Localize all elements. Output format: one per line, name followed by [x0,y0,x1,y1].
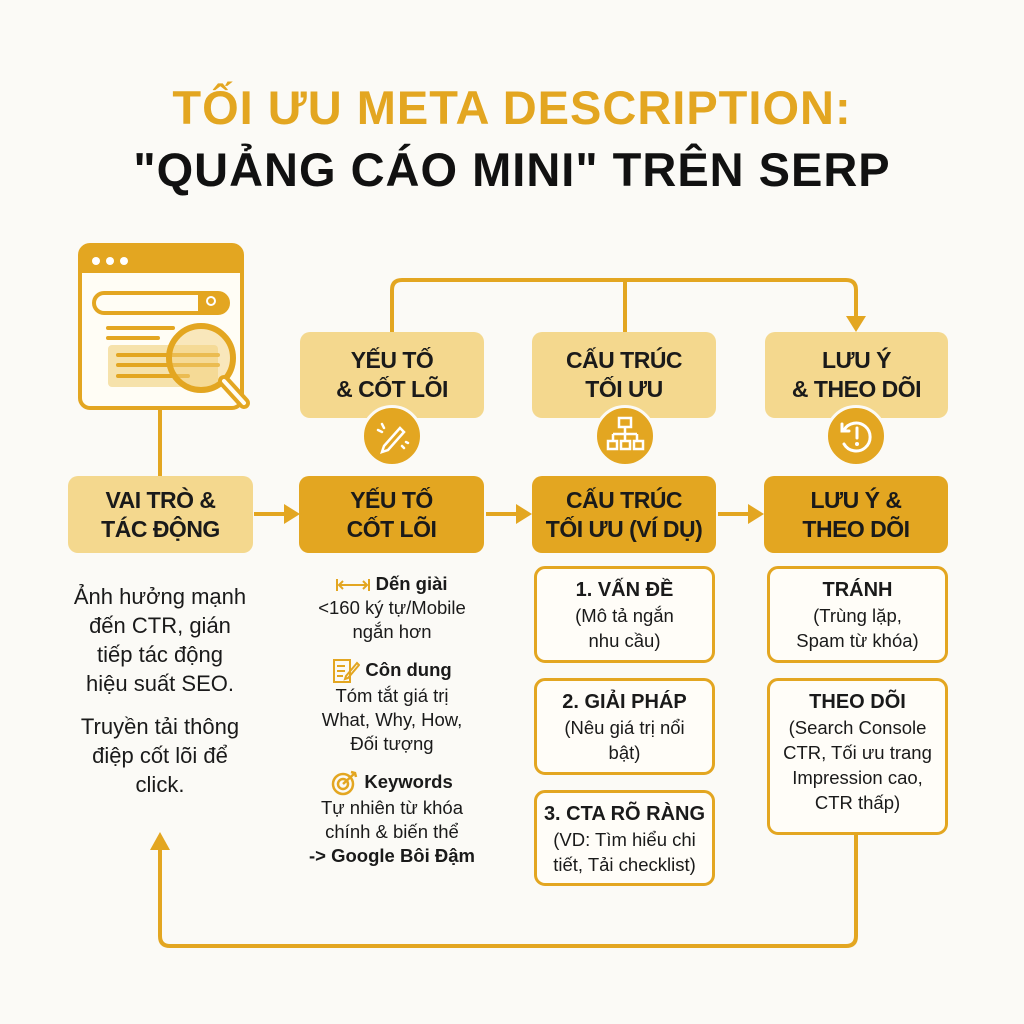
card: giải pháp: bật) [609,742,640,763]
box: yếu tố & cốt lõi: & CỐT LÕI [336,376,448,402]
box: yếu tố cốt lõi: CỐT LÕI [347,516,436,542]
card: vấn đề [534,566,715,663]
box: lưu ý & theo dõi: LƯU Ý [822,347,891,373]
box: vai trò: VAI TRÒ & [105,486,216,512]
title: TỐI ƯU META DESCRIPTION: [172,81,852,134]
text: yếu tố cốt lõi: Côn dung [365,659,452,680]
box: cấu trúc tối ưu ví dụ: TỐI ƯU (VÍ DỤ) [546,516,702,542]
card: CTA: tiết, Tải checklist) [553,854,696,875]
panel: main row boxes [68,476,948,553]
text: yếu tố cốt lõi: Dến giài [376,573,448,594]
box: lưu ý & theo dõi [764,476,948,553]
box: cấu trúc tối ưu [532,332,716,418]
box: vai trò: TÁC ĐỘNG [101,516,220,542]
box: yếu tố & cốt lõi: YẾU TỐ [351,347,433,373]
text: vai trò: tiếp tác động [97,642,223,667]
box: yếu tố cốt lõi: YẾU TỐ [350,486,433,512]
icon: hierarchy [594,405,656,467]
icon: browser with magnifier [78,243,250,410]
text: yếu tố cốt lõi [309,573,475,866]
card: vấn đề: (Mô tả ngắn [575,605,674,626]
panel: top light boxes [300,332,948,418]
text: yếu tố cốt lõi: -> Google Bôi Đậm [309,845,475,866]
card: giải pháp: (Nêu giá trị nổi [564,717,685,738]
card: tránh: TRÁNH [822,579,892,601]
text: vai trò: Ảnh hưởng mạnh [74,584,246,609]
box: yếu tố & cốt lõi [300,332,484,418]
card: theo dõi: CTR thấp) [815,792,900,813]
card: theo dõi: CTR, Tối ưu trang [783,742,932,763]
title [133,81,891,196]
card: tránh: (Trùng lặp, [813,605,902,626]
text: vai trò [74,584,246,797]
text: vai trò: click. [136,772,184,797]
text: yếu tố cốt lõi: Tóm tắt giá trị [335,685,449,706]
icon: pencil [361,405,423,467]
box: cấu trúc tối ưu: CẤU TRÚC [566,347,682,373]
box: lưu ý & theo dõi: LƯU Ý & [810,486,901,512]
text: yếu tố cốt lõi: <160 ký tự/Mobile [318,597,466,618]
text: yếu tố cốt lõi: Đối tượng [350,733,434,754]
card: tránh [767,566,948,663]
card: CTA: 3. CTA RÕ RÀNG [544,803,705,825]
card: vấn đề: nhu cầu) [588,630,660,651]
card: CTA [534,790,715,886]
box: cấu trúc tối ưu ví dụ: CẤU TRÚC [566,486,682,512]
box: lưu ý & theo dõi [765,332,948,418]
card: giải pháp [534,678,715,775]
text: yếu tố cốt lõi: chính & biến thể [325,821,459,842]
text: vai trò: hiệu suất SEO. Truyền tải thông [81,671,239,739]
icon: history alert [825,405,887,467]
title: "QUẢNG CÁO MINI" TRÊN SERP [133,143,891,196]
text: yếu tố cốt lõi: ngắn hơn [352,621,432,642]
text: yếu tố cốt lõi: What, Why, How, [322,709,462,730]
box: yếu tố cốt lõi [299,476,484,553]
box: cấu trúc tối ưu ví dụ [532,476,716,553]
card: vấn đề: 1. VẤN ĐỀ [576,579,673,601]
box: vai trò [68,476,253,553]
text: yếu tố cốt lõi: Keywords [364,771,453,792]
card: theo dõi: (Search Console [789,717,926,738]
card: theo dõi: THEO DÕI [809,691,906,713]
card: tránh: Spam từ khóa) [796,630,919,651]
text: yếu tố cốt lõi: Tự nhiên từ khóa [321,797,463,818]
box: lưu ý & theo dõi: & THEO DÕI [792,376,921,402]
card: theo dõi: Impression cao, [792,767,923,788]
text: vai trò: điệp cốt lõi để [92,743,228,768]
text: vai trò: đến CTR, gián [89,613,231,638]
card: theo dõi [767,678,948,835]
box: lưu ý & theo dõi: THEO DÕI [802,516,910,542]
box: cấu trúc tối ưu: TỐI ƯU [585,376,663,402]
card: CTA: (VD: Tìm hiểu chi [553,829,696,850]
card: giải pháp: 2. GIẢI PHÁP [562,691,687,713]
